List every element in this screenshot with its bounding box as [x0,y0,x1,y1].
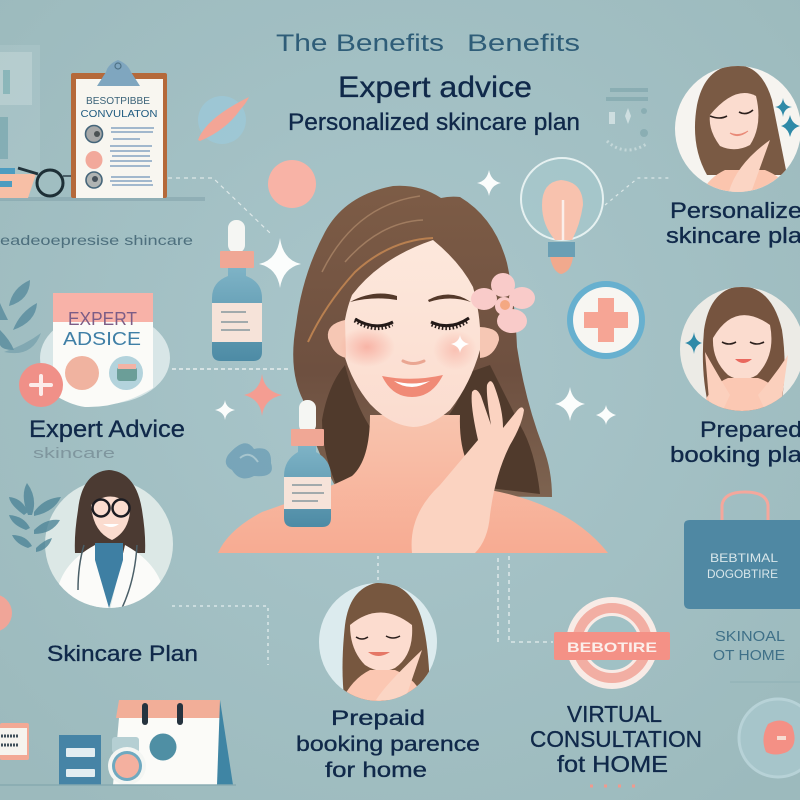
icon: medical cross [567,281,645,359]
label: prepaid booking for home: Prepaid [331,707,425,730]
woman: back hair [293,186,552,497]
shelf with box and magnifying glass [0,168,205,201]
product box [59,735,101,785]
woman: blush [339,327,477,370]
plus badge [19,363,63,407]
connector: doctor to skincare plan [172,606,268,665]
caption: skindal at home [713,628,785,664]
woman: eyebrows [350,294,471,302]
small jar at left edge [0,723,29,760]
stamp badge [554,597,670,689]
woman: nose [403,361,424,364]
label: personalized skincare plan: skincare pla [666,223,800,248]
window scene at left edge [0,45,40,200]
label: virtual consultation for home [530,701,702,777]
label: skincare plan: Skincare Plan [47,641,198,666]
label: personalized skincare plan [666,198,800,248]
doctor hair [75,470,145,553]
card thumbnails [65,356,143,390]
title: The Benefits [276,30,444,57]
card heading: EXPERT [68,309,137,329]
label: personalized skincare plan: Personalize [670,198,800,223]
heading: personalized skincare plan: Personalized skincare plan [288,109,580,136]
label: prepared booking plan [670,417,800,467]
decorative pink dots [590,784,640,788]
connector: card to face [172,368,290,370]
plant: lower left [9,483,61,552]
woman: neck and shoulders [218,415,608,553]
portrait: doctor [45,470,173,615]
woman: mouth [382,375,443,397]
petri dish icon [730,682,800,777]
heading: expert advice label: Expert Advice [29,416,185,443]
label: virtual consultation for home: CONSULTATION [530,726,702,752]
woman: hair highlights [308,196,433,342]
title [276,30,580,57]
woman: hand [412,381,524,553]
caption: skindal at home: OT HOME [713,647,785,664]
icon: peach circle [268,160,316,208]
shopping bag panel: DOGOBTIRE [707,567,778,581]
caption: skindal at home: SKINOAL [715,628,785,645]
label: virtual consultation for home: VIRTUAL [567,701,662,727]
label: virtual consultation for home: fot HOME [557,751,668,777]
bottle: lower serum [284,400,331,527]
panel: clipboard consultation [71,60,167,198]
woman: sparkle on cheek [451,335,469,353]
connector: to stamp [498,556,553,642]
title: Benefits [467,30,580,57]
portrait: personalized skincare [675,65,800,200]
icon: blue flower [226,443,272,478]
label: prepaid booking for home: booking parence [296,733,480,756]
plant: upper left [0,280,41,353]
caption: garbled skincare: eadeoepresise shincare [0,232,193,248]
shopping bag panel: BEBTIMAL [710,551,778,565]
connector: bulb to portrait [605,178,672,205]
connector: woman to prepaid portrait [377,556,379,580]
stamp badge: BEBOTIRE [567,639,657,655]
icon: edge peach circle [0,594,12,632]
woman: ears [328,320,499,358]
shopping bag panel [684,492,800,609]
clipboard subheading: CONVULATON [80,109,158,120]
woman: face [343,240,480,427]
clipboard text lines [110,128,154,185]
bottle: upper serum [212,220,262,361]
calendar and products [0,700,236,785]
panel: expert advice card [19,293,170,407]
label: prepared booking plan: Prepared [700,417,800,442]
woman: hair shadows [322,365,540,494]
caption: skincare: skincare [33,445,115,462]
sparkle [685,332,702,354]
woman: flower [471,273,535,333]
label: prepaid booking for home: for home [325,759,427,782]
main illustration: woman [218,186,608,553]
portrait: relaxed woman [680,286,800,412]
icon: faint sketch cluster [606,88,648,150]
clipboard icons [86,126,102,188]
label: prepaid booking for home [296,707,480,782]
woman: closed eyes [355,318,469,328]
icon: leaf disc [198,96,249,144]
sparkles and stars [215,170,616,425]
portrait: prepaid booking [319,582,437,705]
sparkles [775,98,800,137]
cream jar [108,737,146,785]
clipboard heading: BESOTPIBBE [86,96,150,107]
connector: clipboard to bottle [168,178,270,233]
icon: light bulb [521,158,603,274]
heading: expert advice: Expert advice [338,71,532,104]
card subheading: ADSICE [63,329,141,349]
label: prepared booking plan: booking pla [670,442,800,467]
